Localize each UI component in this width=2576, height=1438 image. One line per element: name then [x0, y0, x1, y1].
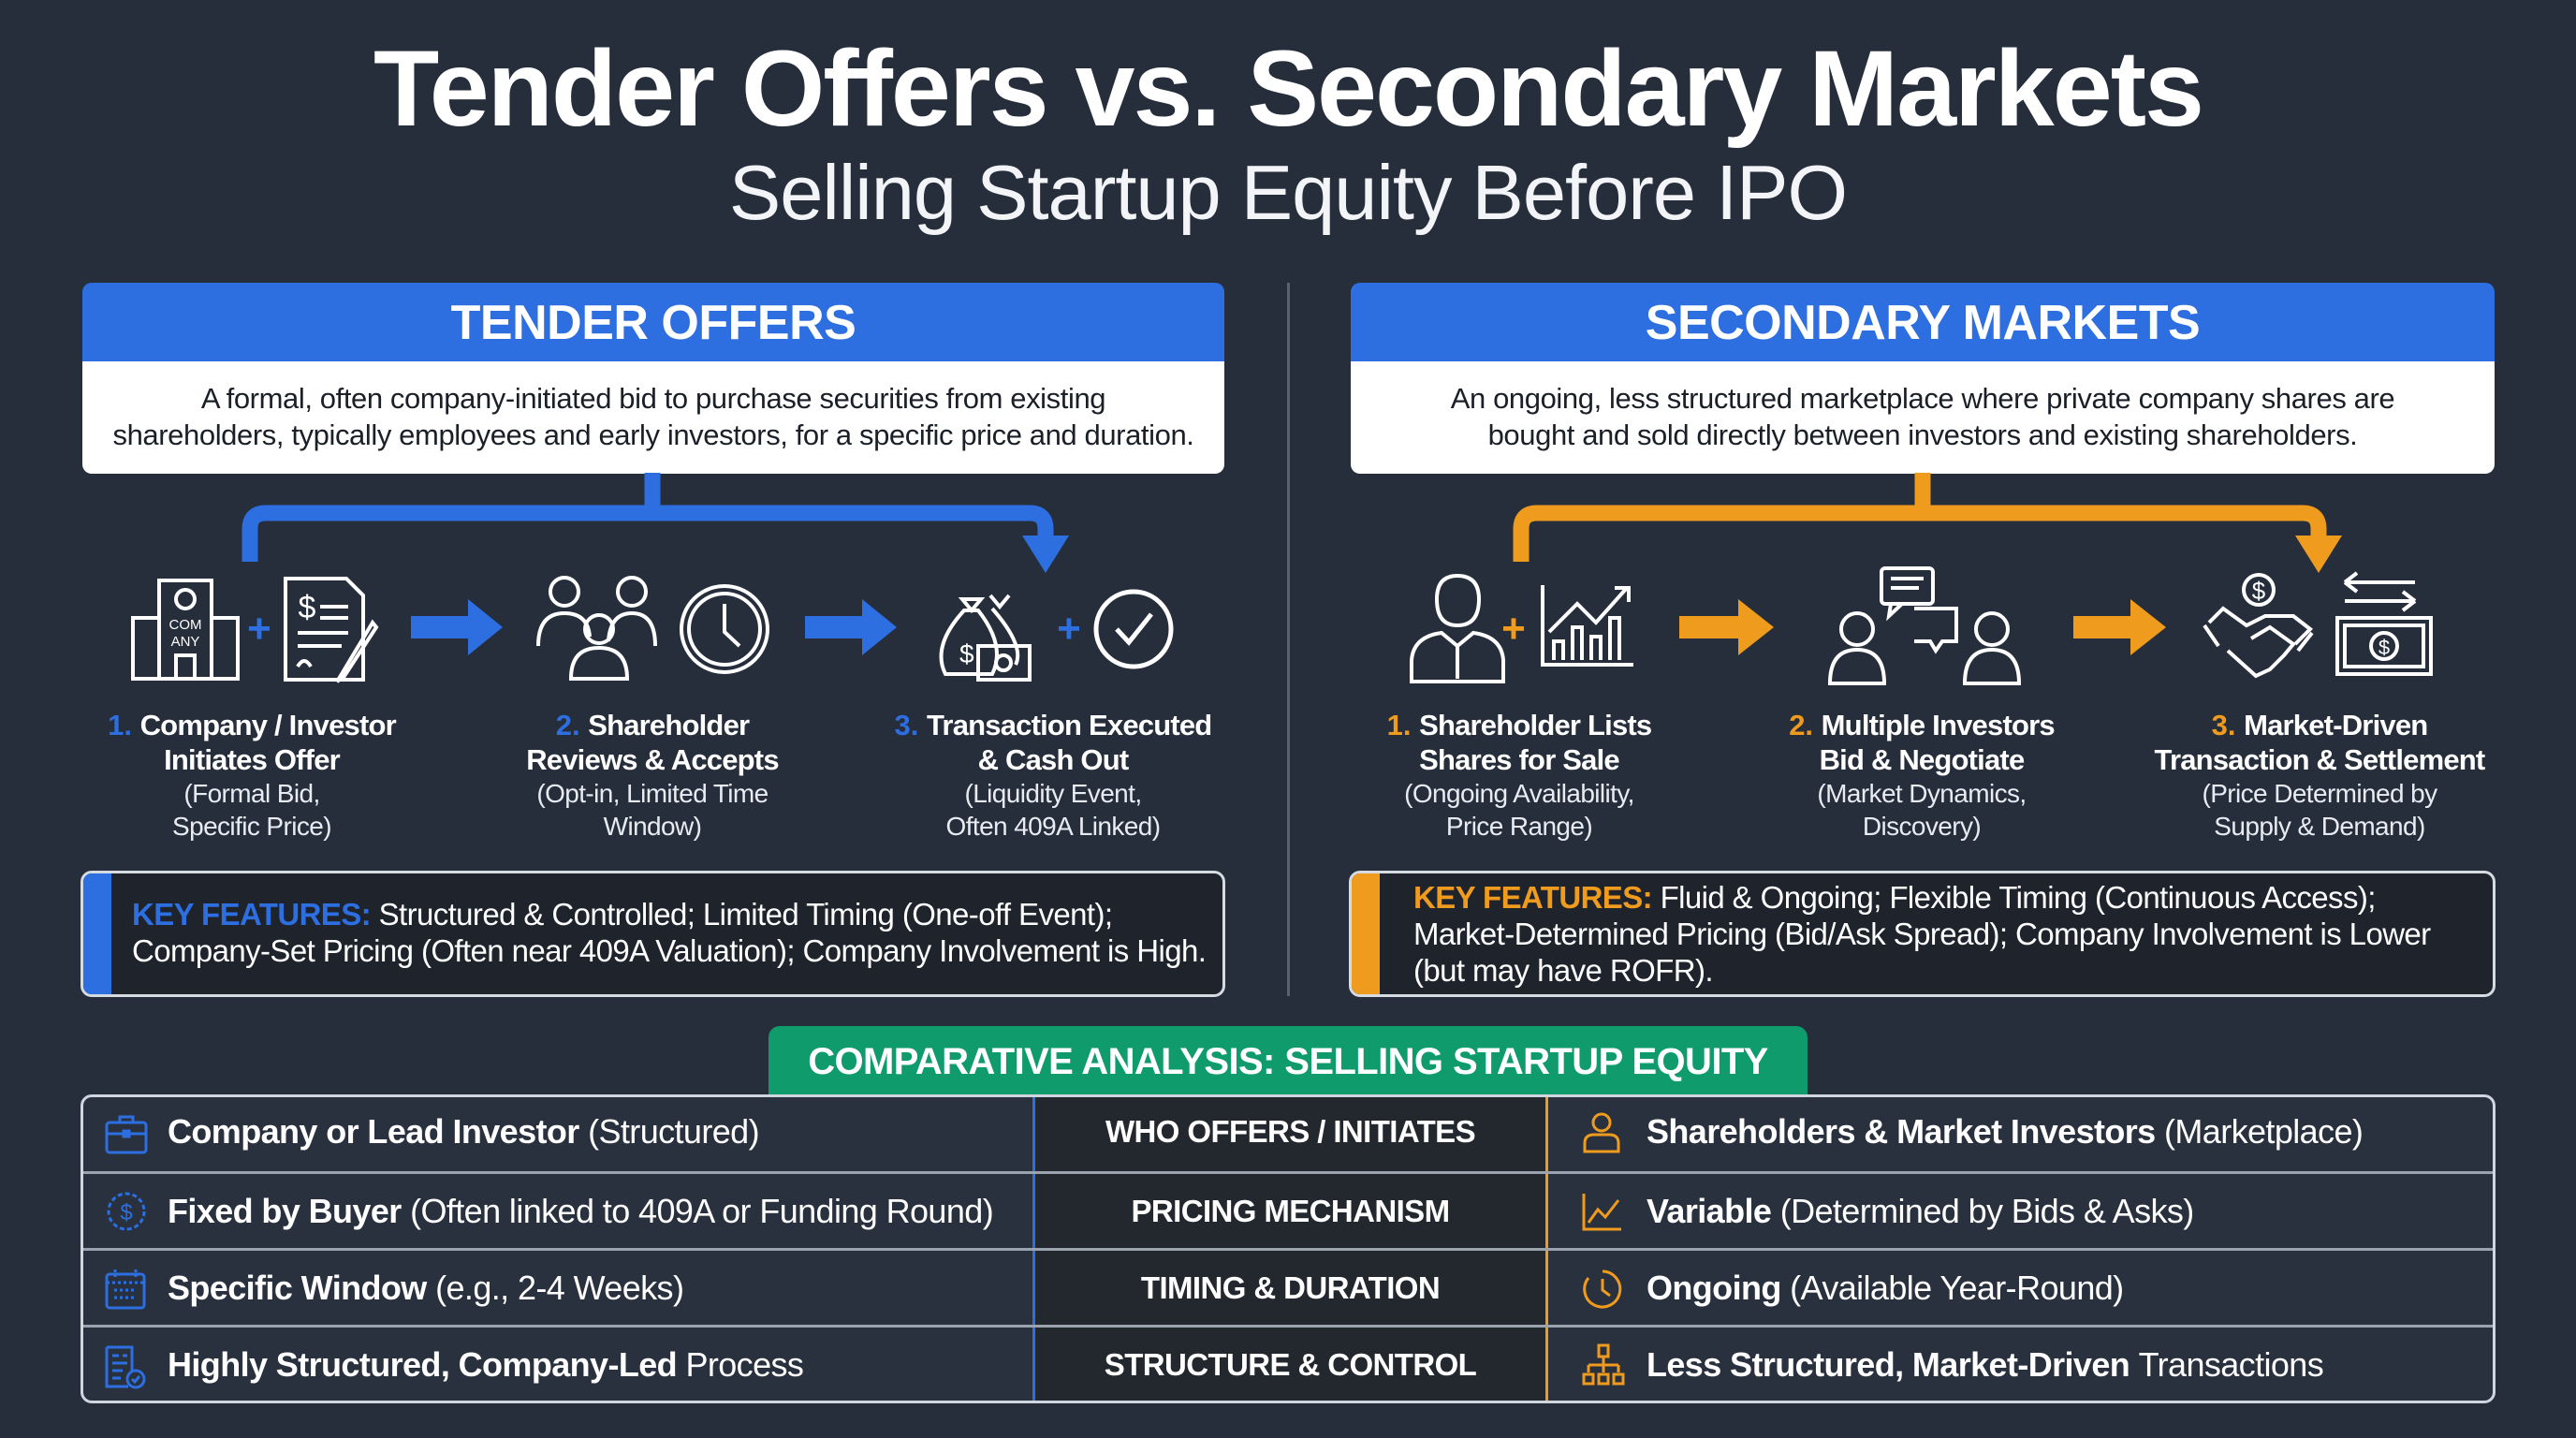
key features: tender [80, 871, 1225, 997]
step: tender 1: Specific Price) [172, 812, 331, 841]
step: tender 2: (Opt-in, Limited Time [536, 779, 768, 808]
key features: secondary: KEY FEATURES: Fluid & Ongoing; Flexible Timing (Continuous Access); [1413, 880, 2376, 915]
heading: tender offers: TENDER OFFERS [451, 296, 856, 350]
key features: tender: KEY FEATURES: Structured & Controlled; Limited Timing (One-off Event); [132, 897, 1112, 932]
step: secondary 1: 1. Shareholder Lists [1387, 709, 1651, 741]
row: structure: STRUCTURE & CONTROL [1105, 1346, 1476, 1382]
icon: company building [133, 580, 238, 679]
row: pricing: (Often linked to 409A or Funding Round) [410, 1191, 993, 1230]
step: secondary 1: Price Range) [1446, 812, 1592, 841]
step: tender 2: Window) [604, 812, 701, 841]
step: secondary 2: Bid & Negotiate [1820, 743, 2024, 776]
row: timing: Specific Window [168, 1268, 427, 1307]
step: secondary 3 [2155, 709, 2485, 841]
subtitle: Selling Startup Equity Before IPO [729, 149, 1847, 236]
icon: money bags: $ [959, 639, 974, 668]
step: tender 3: (Liquidity Event, [964, 779, 1142, 808]
icon: check [1096, 592, 1171, 667]
title: Tender Offers vs. Secondary Markets [373, 29, 2203, 149]
step: tender 3: & Cash Out [978, 743, 1128, 776]
icon: calendar [105, 1269, 146, 1309]
icon: clock [1583, 1269, 1621, 1309]
step: secondary 2 [1789, 709, 2055, 841]
heading: secondary markets: SECONDARY MARKETS [1646, 296, 2200, 350]
icon: checklist [105, 1346, 146, 1389]
row: structure: Process [685, 1344, 803, 1384]
row: who offers [105, 1112, 2363, 1153]
row: pricing: (Determined by Bids & Asks) [1780, 1191, 2194, 1230]
step: secondary 2: 2. Multiple Investors [1789, 709, 2055, 741]
description: shareholders, typically employees and early investors, for a specific price and duration. [112, 418, 1194, 451]
step: tender 1 [108, 709, 397, 841]
row: who offers: Company or Lead Investor [168, 1112, 579, 1150]
step: tender 3: 3. Transaction Executed [895, 709, 1211, 741]
step: tender 3: Often 409A Linked) [946, 812, 1160, 841]
icon: dollar badge [107, 1193, 146, 1230]
icon: handshake [2204, 575, 2312, 676]
comparison table [80, 1094, 2496, 1403]
heading: tender offers [82, 283, 1224, 361]
icon: money exchange [2337, 573, 2431, 674]
step: tender 1: Initiates Offer [164, 743, 340, 776]
row: timing: (e.g., 2-4 Weeks) [435, 1268, 683, 1307]
row: timing: Ongoing [1647, 1268, 1781, 1307]
row: pricing: Fixed by Buyer [168, 1191, 402, 1230]
step: tender 2 [526, 709, 779, 841]
icon: investors negotiating [1830, 568, 2019, 683]
icon: dollar badge: $ [120, 1200, 133, 1225]
divider [1287, 283, 1290, 996]
plus signs: + [247, 606, 271, 652]
icon: shareholders group [538, 578, 655, 679]
step: tender 2: 2. Shareholder [556, 709, 749, 741]
row: who offers: (Structured) [588, 1112, 759, 1150]
row: structure [83, 1325, 2498, 1401]
row: timing: (Available Year-Round) [1790, 1268, 2124, 1307]
icon: document [285, 579, 376, 682]
key features: secondary: (but may have ROFR). [1413, 953, 1713, 988]
icon: chart [1543, 585, 1633, 665]
connector: tender [250, 473, 1069, 573]
description [82, 361, 1224, 474]
step: secondary 2: Discovery) [1863, 812, 1981, 841]
key features: tender: Company-Set Pricing (Often near 409A Valuation); Company Involvement is High. [132, 933, 1206, 968]
panel: secondary markets [1351, 283, 2495, 474]
step: secondary 3: Transaction & Settlement [2155, 743, 2484, 776]
icon: hierarchy [1582, 1344, 1625, 1386]
description: An ongoing, less structured marketplace where private company shares are [1451, 382, 2394, 415]
row: timing [83, 1248, 2498, 1325]
arrows: tender [411, 599, 897, 655]
icon: money exchange: $ [2378, 636, 2390, 659]
heading: comparative analysis: COMPARATIVE ANALYSIS: SELLING STARTUP EQUITY [808, 1041, 1768, 1082]
step: secondary 3: (Price Determined by [2202, 779, 2437, 808]
row: pricing: Variable [1647, 1191, 1771, 1230]
row: timing: TIMING & DURATION [1141, 1269, 1440, 1305]
step: tender 1: 1. Company / Investor [108, 709, 396, 741]
step: tender 2: Reviews & Accepts [526, 743, 779, 776]
heading: secondary markets [1351, 283, 2495, 361]
plus signs [247, 606, 1526, 652]
step: secondary 1 [1387, 709, 1651, 841]
row: pricing [83, 1171, 2498, 1248]
icon: document: $ [299, 590, 316, 625]
row: structure: Highly Structured, Company-Led [168, 1344, 677, 1384]
key features: secondary: Market-Determined Pricing (Bid/Ask Spread); Company Involvement is Lower [1413, 917, 2431, 951]
connector: secondary [1521, 473, 2342, 573]
row: who offers: (Marketplace) [2164, 1112, 2363, 1150]
description: A formal, often company-initiated bid to purchase securities from existing [201, 382, 1105, 415]
step: secondary 2: (Market Dynamics, [1817, 779, 2027, 808]
icon: briefcase [105, 1116, 148, 1153]
key features: secondary [1349, 871, 2496, 997]
arrows: secondary [1679, 599, 2166, 655]
row: who offers: WHO OFFERS / INITIATES [1105, 1114, 1475, 1148]
plus signs: + [1057, 606, 1081, 652]
row: structure: Less Structured, Market-Driven [1647, 1344, 2130, 1384]
icon: handshake: $ [2252, 577, 2266, 605]
icon: company building: ANY [171, 634, 199, 650]
step: secondary 3: Supply & Demand) [2214, 812, 2425, 841]
row: structure: Transactions [2139, 1344, 2323, 1384]
icon: company building: COM [168, 617, 202, 633]
step: tender 1: (Formal Bid, [183, 779, 320, 808]
row: pricing: PRICING MECHANISM [1131, 1193, 1449, 1228]
icon: person [1584, 1112, 1619, 1153]
panel: tender offers [82, 283, 1224, 474]
step: tender 3 [895, 709, 1211, 841]
step: secondary 1: (Ongoing Availability, [1404, 779, 1634, 808]
step: secondary 1: Shares for Sale [1419, 743, 1619, 776]
description: bought and sold directly between investors and existing shareholders. [1488, 418, 2357, 451]
icon: trend chart [1582, 1194, 1621, 1230]
icon: clock [681, 586, 768, 672]
icon: shareholder person [1412, 576, 1503, 682]
description [1351, 361, 2495, 474]
step: secondary 3: 3. Market-Driven [2212, 709, 2427, 741]
icon: money bags [942, 595, 1030, 680]
heading: comparative analysis [768, 1026, 1808, 1096]
row: who offers: Shareholders & Market Investors [1647, 1112, 2156, 1150]
plus signs: + [1501, 606, 1526, 652]
